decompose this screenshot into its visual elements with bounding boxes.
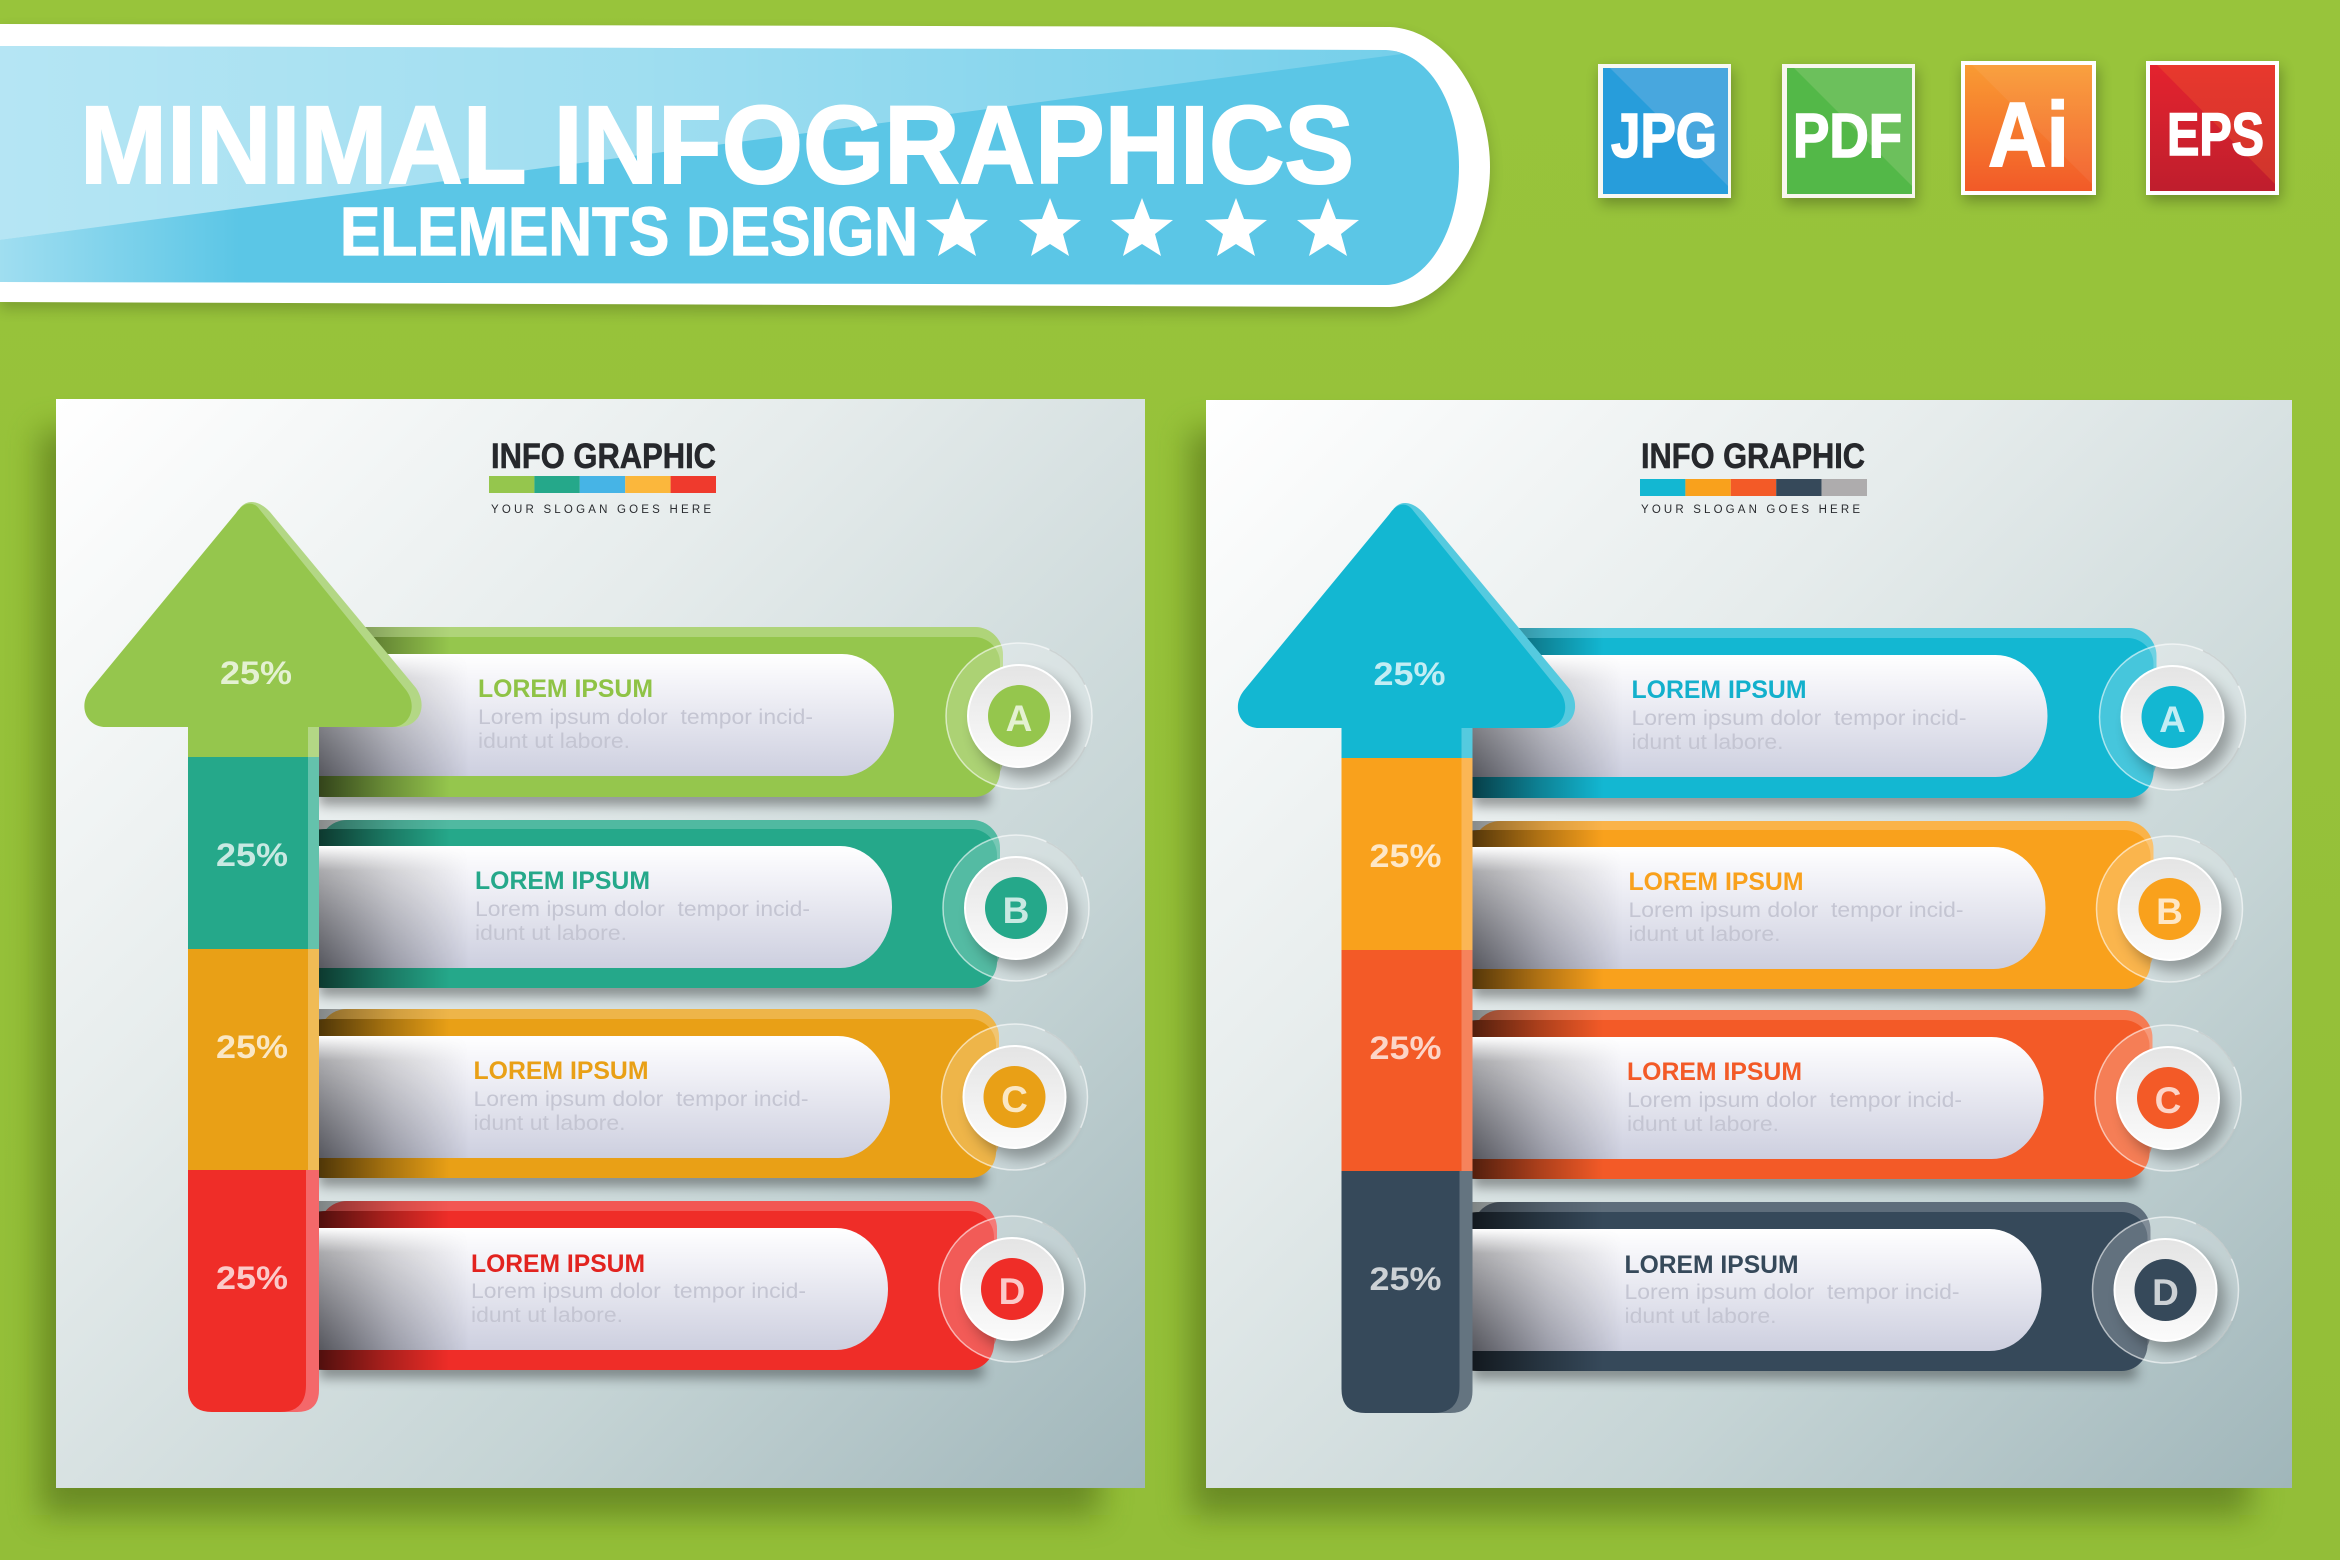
row B <box>1454 821 2242 997</box>
row A text: LOREM IPSUM <box>1632 676 1806 704</box>
rating stars <box>926 198 1359 256</box>
arrow <box>1238 503 1575 1413</box>
icon: JPG badge <box>1598 64 1733 204</box>
row B text: LOREM IPSUM <box>475 867 650 895</box>
row D text: idunt ut labore. <box>471 1304 623 1327</box>
row C text <box>474 1057 809 1135</box>
row B text: idunt ut labore. <box>475 922 627 945</box>
row D text <box>1624 1251 1960 1328</box>
row D text: LOREM IPSUM <box>1624 1251 1798 1279</box>
panel shadow: left <box>40 430 1100 1515</box>
row C text: Lorem ipsum dolor tempor incid- <box>1627 1089 1962 1112</box>
row C <box>1454 1010 2241 1187</box>
percent labels: 25% <box>1370 838 1442 874</box>
panel shadow: right <box>1190 430 2250 1515</box>
row C <box>300 1009 1088 1186</box>
row C badge: C <box>2155 1080 2181 1121</box>
row C text: Lorem ipsum dolor tempor incid- <box>474 1088 809 1111</box>
panel: left infographic <box>84 502 1092 1412</box>
right panel logo: YOUR SLOGAN GOES HERE <box>1641 504 1860 516</box>
row A text <box>1632 676 1967 754</box>
row D text: LOREM IPSUM <box>471 1250 645 1278</box>
row A text: Lorem ipsum dolor tempor incid- <box>478 706 813 729</box>
banner title: MINIMAL INFOGRAPHICS <box>80 84 1354 207</box>
row A <box>300 627 1092 805</box>
row A text: idunt ut labore. <box>478 730 630 753</box>
percent labels: 25% <box>216 1029 288 1065</box>
panel: left background <box>56 399 1145 1488</box>
row A badge: A <box>2159 699 2186 740</box>
row B badge: B <box>1003 890 1029 931</box>
percent labels: 25% <box>1374 656 1446 692</box>
row B text: Lorem ipsum dolor tempor incid- <box>475 898 810 921</box>
row D badge <box>939 1216 1085 1362</box>
row A text <box>478 675 813 753</box>
row D text: Lorem ipsum dolor tempor incid- <box>1624 1281 1960 1304</box>
row B badge <box>943 835 1089 981</box>
icon: EPS badge: EPS <box>2167 101 2264 168</box>
row A badge: A <box>1006 698 1032 739</box>
row B badge: B <box>2156 891 2183 932</box>
row A <box>1454 628 2246 806</box>
panel: right infographic <box>1238 503 2246 1413</box>
row D text: Lorem ipsum dolor tempor incid- <box>471 1280 806 1303</box>
row B <box>300 820 1089 996</box>
row C text: LOREM IPSUM <box>474 1057 648 1085</box>
left panel logo <box>489 437 716 516</box>
icon: PDF badge <box>1782 64 1917 204</box>
icon: EPS badge <box>2146 61 2281 201</box>
row B badge <box>2096 836 2242 982</box>
row D text <box>471 1250 806 1327</box>
icon: Ai badge: Ai <box>1988 84 2069 186</box>
left panel logo: INFO GRAPHIC <box>491 437 716 476</box>
percent labels <box>216 655 292 1296</box>
row B text <box>475 867 810 945</box>
row B text <box>1628 868 1964 946</box>
row A text: idunt ut labore. <box>1632 731 1784 754</box>
percent labels: 25% <box>220 655 292 691</box>
percent labels: 25% <box>1370 1261 1442 1297</box>
percent labels: 25% <box>1370 1030 1442 1066</box>
row C badge: C <box>1001 1079 1028 1120</box>
row C text: idunt ut labore. <box>474 1112 626 1135</box>
row A text: Lorem ipsum dolor tempor incid- <box>1632 707 1967 730</box>
row B text: LOREM IPSUM <box>1628 868 1804 896</box>
row D <box>300 1201 1085 1378</box>
icon: PDF badge: PDF <box>1793 102 1902 171</box>
right panel logo <box>1640 437 1867 516</box>
row D <box>1454 1202 2238 1379</box>
percent labels <box>1370 656 1446 1297</box>
row C text: idunt ut labore. <box>1627 1113 1779 1136</box>
row C badge <box>2095 1025 2241 1171</box>
row A badge <box>2100 644 2246 790</box>
left panel logo: YOUR SLOGAN GOES HERE <box>491 504 711 516</box>
panel: right background <box>1206 400 2292 1488</box>
right panel logo: INFO GRAPHIC <box>1641 437 1865 476</box>
row D badge <box>2092 1217 2238 1363</box>
percent labels: 25% <box>216 1260 288 1296</box>
arrow <box>84 502 422 1412</box>
row A badge <box>946 643 1092 789</box>
row B text: Lorem ipsum dolor tempor incid- <box>1628 899 1964 922</box>
percent labels: 25% <box>216 837 288 873</box>
icon: Ai badge <box>1961 61 2098 201</box>
row B text: idunt ut labore. <box>1628 923 1780 946</box>
row A text: LOREM IPSUM <box>478 675 653 703</box>
row C text <box>1627 1058 1962 1136</box>
icon: JPG badge: JPG <box>1611 102 1717 171</box>
row D badge: D <box>999 1271 1025 1312</box>
banner <box>0 24 1490 314</box>
banner subtitle: ELEMENTS DESIGN <box>340 193 918 270</box>
row D badge: D <box>2152 1272 2179 1313</box>
row C badge <box>942 1024 1088 1170</box>
row C text: LOREM IPSUM <box>1627 1058 1802 1086</box>
row D text: idunt ut labore. <box>1624 1305 1776 1328</box>
